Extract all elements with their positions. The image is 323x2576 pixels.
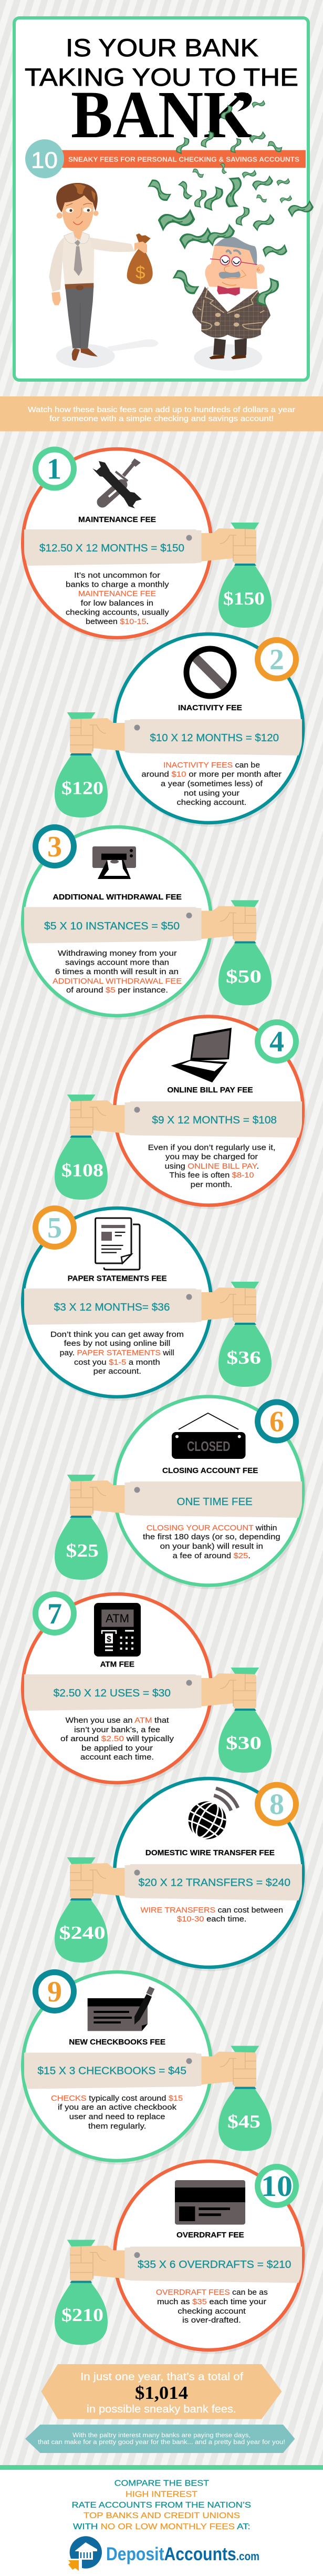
intro banner: Watch how these basic fees can add up to hundreds of dollars a year (28, 406, 295, 414)
description (156, 2288, 268, 2325)
heading: ATM FEE (100, 1660, 134, 1669)
description: CHECKS typically cost around $15 (51, 2094, 183, 2103)
number badge (257, 2167, 296, 2205)
subtitle text: SNEAKY FEES FOR PERSONAL CHECKING & SAVINGS ACCOUNTS (68, 156, 299, 163)
footer (0, 2465, 323, 2576)
panel: fee 7 atm (23, 1594, 272, 1786)
panel: fee 9 new checkbooks (23, 1972, 272, 2165)
description: WIRE TRANSFERS can cost between (141, 1906, 283, 1915)
call to action text: RATE ACCOUNTS FROM THE NATION’S (71, 2501, 251, 2510)
description (66, 571, 169, 626)
panel: fee 3 additional withdrawal (23, 827, 272, 1020)
panel: fee 4 online bill pay (55, 1017, 307, 1209)
description: 6 times a month will result in an (55, 968, 179, 976)
arm, hand and money bag (24, 1668, 272, 1773)
arm, hand and money bag (24, 523, 272, 628)
description: is over-drafted. (182, 2316, 241, 2325)
heading: DOMESTIC WIRE TRANSFER FEE (145, 1849, 275, 1857)
calculation: $5 X 10 INSTANCES = $50 (44, 920, 180, 932)
heading: INACTIVITY FEE (178, 704, 242, 712)
circle ring (23, 449, 211, 638)
description: This fee is often $8-10 (169, 1171, 254, 1180)
calculation: $15 X 3 CHECKBOOKS = $45 (37, 2065, 186, 2077)
circle ring (114, 1778, 303, 1967)
bag amount: $36 (226, 1347, 261, 1368)
calculation: $2.50 X 12 USES = $30 (54, 1687, 171, 1699)
arm, hand and money bag (55, 1095, 302, 1200)
bag amount: $25 (66, 1540, 99, 1561)
badge circle 10 (25, 139, 64, 178)
icon: closed sign: CLOSED (187, 1438, 230, 1454)
description: Even if you don’t regularly use it, (148, 1144, 276, 1152)
bag amount: $120 (61, 778, 103, 799)
description: around $10 or more per month after (141, 771, 282, 779)
heading: OVERDRAFT FEE (176, 2231, 244, 2240)
number badge (36, 1594, 74, 1633)
title line 2: TAKING YOU TO THE (25, 63, 298, 91)
description: using ONLINE BILL PAY . (165, 1162, 259, 1171)
closing remark banner (25, 2425, 295, 2453)
circle ring (114, 1017, 303, 1205)
icon: paper documents (96, 1218, 140, 1270)
description: them regularly. (88, 2122, 146, 2131)
calculation: $3 X 12 MONTHS= $36 (54, 1301, 170, 1313)
description: OVERDRAFT FEES can be as (156, 2288, 268, 2297)
number badge (36, 1972, 74, 2010)
bag amount: $45 (227, 2111, 261, 2132)
bag amount: $240 (59, 1923, 106, 1943)
description: cost you $1-5 a month (74, 1358, 160, 1367)
description: of around $5 per instance. (66, 986, 168, 995)
number badge: 3 (47, 831, 62, 863)
description (141, 1906, 283, 1924)
description: you may be charged for (165, 1153, 258, 1161)
description: savings account more than (65, 959, 169, 967)
panel: fee 2 inactivity (55, 634, 307, 826)
calculation: $9 X 12 MONTHS = $108 (152, 1114, 277, 1126)
closing remark banner: With the paltry interest many banks are paying these days, (72, 2432, 251, 2439)
bag amount: $150 (223, 588, 265, 609)
description: MAINTENANCE FEE (78, 590, 156, 598)
circle ring (23, 827, 211, 1016)
description: Don’t think you can get away from (50, 1331, 184, 1339)
circle ring (114, 634, 303, 823)
man with money bag: $ (136, 263, 145, 282)
total banner: $1,014 (135, 2383, 188, 2403)
heading: ONLINE BILL PAY FEE (167, 1086, 253, 1095)
description (148, 1144, 276, 1189)
closing remark banner: that can make for a pretty good year for the bank... and a pretty bad year for you! (38, 2439, 285, 2446)
logo: wordmark: DepositAccounts.com (106, 2544, 259, 2564)
description: account each time. (80, 1753, 154, 1762)
description: per account. (93, 1367, 141, 1376)
panel: header card (14, 18, 315, 380)
arm, hand and money bag (55, 1475, 302, 1580)
description: It’s not uncommon for (74, 571, 160, 580)
icon: ATM machine: $ (107, 1635, 111, 1644)
bag amount: $210 (61, 2305, 103, 2325)
description: Withdrawing money from your (58, 949, 177, 958)
bag amount: $30 (226, 1733, 262, 1753)
description: a fee of around $25. (173, 1552, 251, 1560)
icon: ATM machine: ATM (106, 1612, 129, 1625)
heading: CLOSING ACCOUNT FEE (162, 1467, 258, 1475)
panel: fee 1 maintenance (23, 449, 272, 641)
call to action text: TOP BANKS AND CREDIT UNIONS (84, 2511, 240, 2520)
number badge: 6 (269, 1406, 284, 1438)
description: a year (sometimes less) of (161, 780, 263, 789)
logo: bank icon (68, 2536, 102, 2571)
description: on your bank) will result in (160, 1542, 263, 1551)
description: CLOSING YOUR ACCOUNT within (147, 1524, 277, 1532)
description (141, 761, 282, 807)
number badge: 2 (269, 643, 284, 676)
icon: bank card (175, 2180, 245, 2225)
panel: fee 10 overdraft (55, 2161, 307, 2354)
arm, hand and money bag (55, 2240, 302, 2345)
man with money bag (49, 183, 159, 368)
intro banner (0, 396, 323, 431)
calculation: $35 X 6 OVERDRAFTS = $210 (138, 2258, 291, 2271)
title line 1: IS YOUR BANK (66, 34, 258, 62)
description: ADDITIONAL WITHDRAWAL FEE (53, 977, 182, 986)
icon: globe with signal (182, 1788, 238, 1846)
description (53, 949, 182, 995)
number badge (257, 1785, 296, 1823)
calculation: $12.50 X 12 MONTHS = $150 (39, 542, 184, 554)
card frame (14, 18, 308, 380)
description (143, 1524, 280, 1560)
icon: laptop (171, 1028, 232, 1082)
panel: fee 5 paper statements (23, 1208, 272, 1401)
K swash (236, 93, 252, 111)
circle ring (23, 1208, 211, 1397)
description: checking account (178, 2307, 246, 2316)
banker (192, 237, 270, 371)
description: When you use an ATM that (66, 1716, 169, 1725)
number badge: 7 (47, 1598, 62, 1630)
description: user and need to replace (69, 2113, 165, 2121)
number badge (36, 449, 74, 488)
number badge: 5 (47, 1212, 62, 1244)
call to action text (71, 2479, 251, 2531)
title word BANK: BANK (71, 77, 252, 152)
description: if you are an active checkbook (58, 2103, 177, 2112)
number badge: 1 (47, 453, 61, 486)
number badge: 9 (47, 1976, 62, 2008)
total banner: In just one year, that’s a total of (80, 2371, 243, 2383)
description: per month. (191, 1181, 232, 1189)
arm, hand and money bag (24, 900, 272, 1005)
call to action text: WITH NO OR LOW MONTHLY FEES AT: (73, 2522, 251, 2531)
description: INACTIVITY FEES can be (163, 761, 260, 770)
circle ring (114, 1396, 303, 1586)
panel: fee 8 wire transfer (55, 1778, 307, 1971)
bag amount: $108 (61, 1160, 103, 1181)
arm, hand and money bag (24, 2046, 272, 2151)
calculation: $20 X 12 TRANSFERS = $240 (139, 1877, 290, 1888)
circle ring (23, 1594, 211, 1783)
description: fees by not using online bill (64, 1340, 170, 1348)
number badge: 4 (269, 1026, 284, 1058)
heading: MAINTENANCE FEE (78, 516, 156, 524)
description: of around $2.50 will typically (60, 1735, 174, 1743)
panel: fee 6 closing account (55, 1396, 307, 1589)
heading: ADDITIONAL WITHDRAWAL FEE (53, 893, 182, 902)
icon: wrench and screwdriver (92, 458, 142, 508)
bag amount: $50 (226, 966, 262, 987)
description: be applied to your (81, 1744, 153, 1753)
arm, hand and money bag (24, 1282, 272, 1387)
description: banks to charge a monthly (66, 580, 169, 589)
number badge (257, 1022, 296, 1061)
intro banner: for someone with a simple checking and savings account! (49, 415, 274, 423)
description (51, 2094, 183, 2131)
call to action text: COMPARE THE BEST (114, 2479, 210, 2488)
number badge (257, 1402, 296, 1440)
total banner (41, 2364, 282, 2419)
subtitle ribbon (59, 150, 306, 168)
badge number 10: 10 (31, 147, 58, 173)
icon: check and pen (88, 1987, 154, 2031)
icon: cash machine (92, 846, 136, 879)
icon: prohibited sign (186, 649, 234, 696)
flying money bills (145, 98, 315, 308)
icon: ATM machine (94, 1603, 141, 1657)
description: isn’t your bank’s, a fee (74, 1726, 160, 1734)
description: checking accounts, usually (66, 609, 169, 617)
number badge (36, 1208, 74, 1247)
calculation: $10 X 12 MONTHS = $120 (150, 732, 279, 744)
call to action text: HIGH INTEREST (126, 2490, 198, 2499)
arm, hand and money bag (55, 1857, 302, 1962)
number badge: 10 (261, 2170, 293, 2203)
heading: PAPER STATEMENTS FEE (68, 1275, 167, 1283)
description: pay. PAPER STATEMENTS will (60, 1349, 174, 1357)
number badge (257, 640, 296, 678)
circle ring (23, 1972, 211, 2161)
total banner: in possible sneaky bank fees. (87, 2404, 236, 2415)
circle ring (114, 2161, 303, 2350)
description: much as $35 each time your (157, 2298, 266, 2306)
number badge (36, 827, 74, 865)
description: checking account. (176, 799, 246, 807)
icon: closed sign (172, 1413, 246, 1459)
description (60, 1716, 174, 1762)
arm, hand and money bag (55, 712, 302, 817)
description (50, 1331, 184, 1376)
description: the first 180 days (or so, depending (143, 1533, 280, 1541)
description: not using your (184, 789, 239, 798)
calculation: ONE TIME FEE (176, 1496, 253, 1508)
description: $10-30 each time. (177, 1915, 246, 1924)
number badge: 8 (269, 1788, 284, 1821)
heading: NEW CHECKBOOKS FEE (69, 2038, 165, 2047)
description: between $10-15 . (86, 618, 149, 626)
description: for low balances in (81, 599, 153, 608)
